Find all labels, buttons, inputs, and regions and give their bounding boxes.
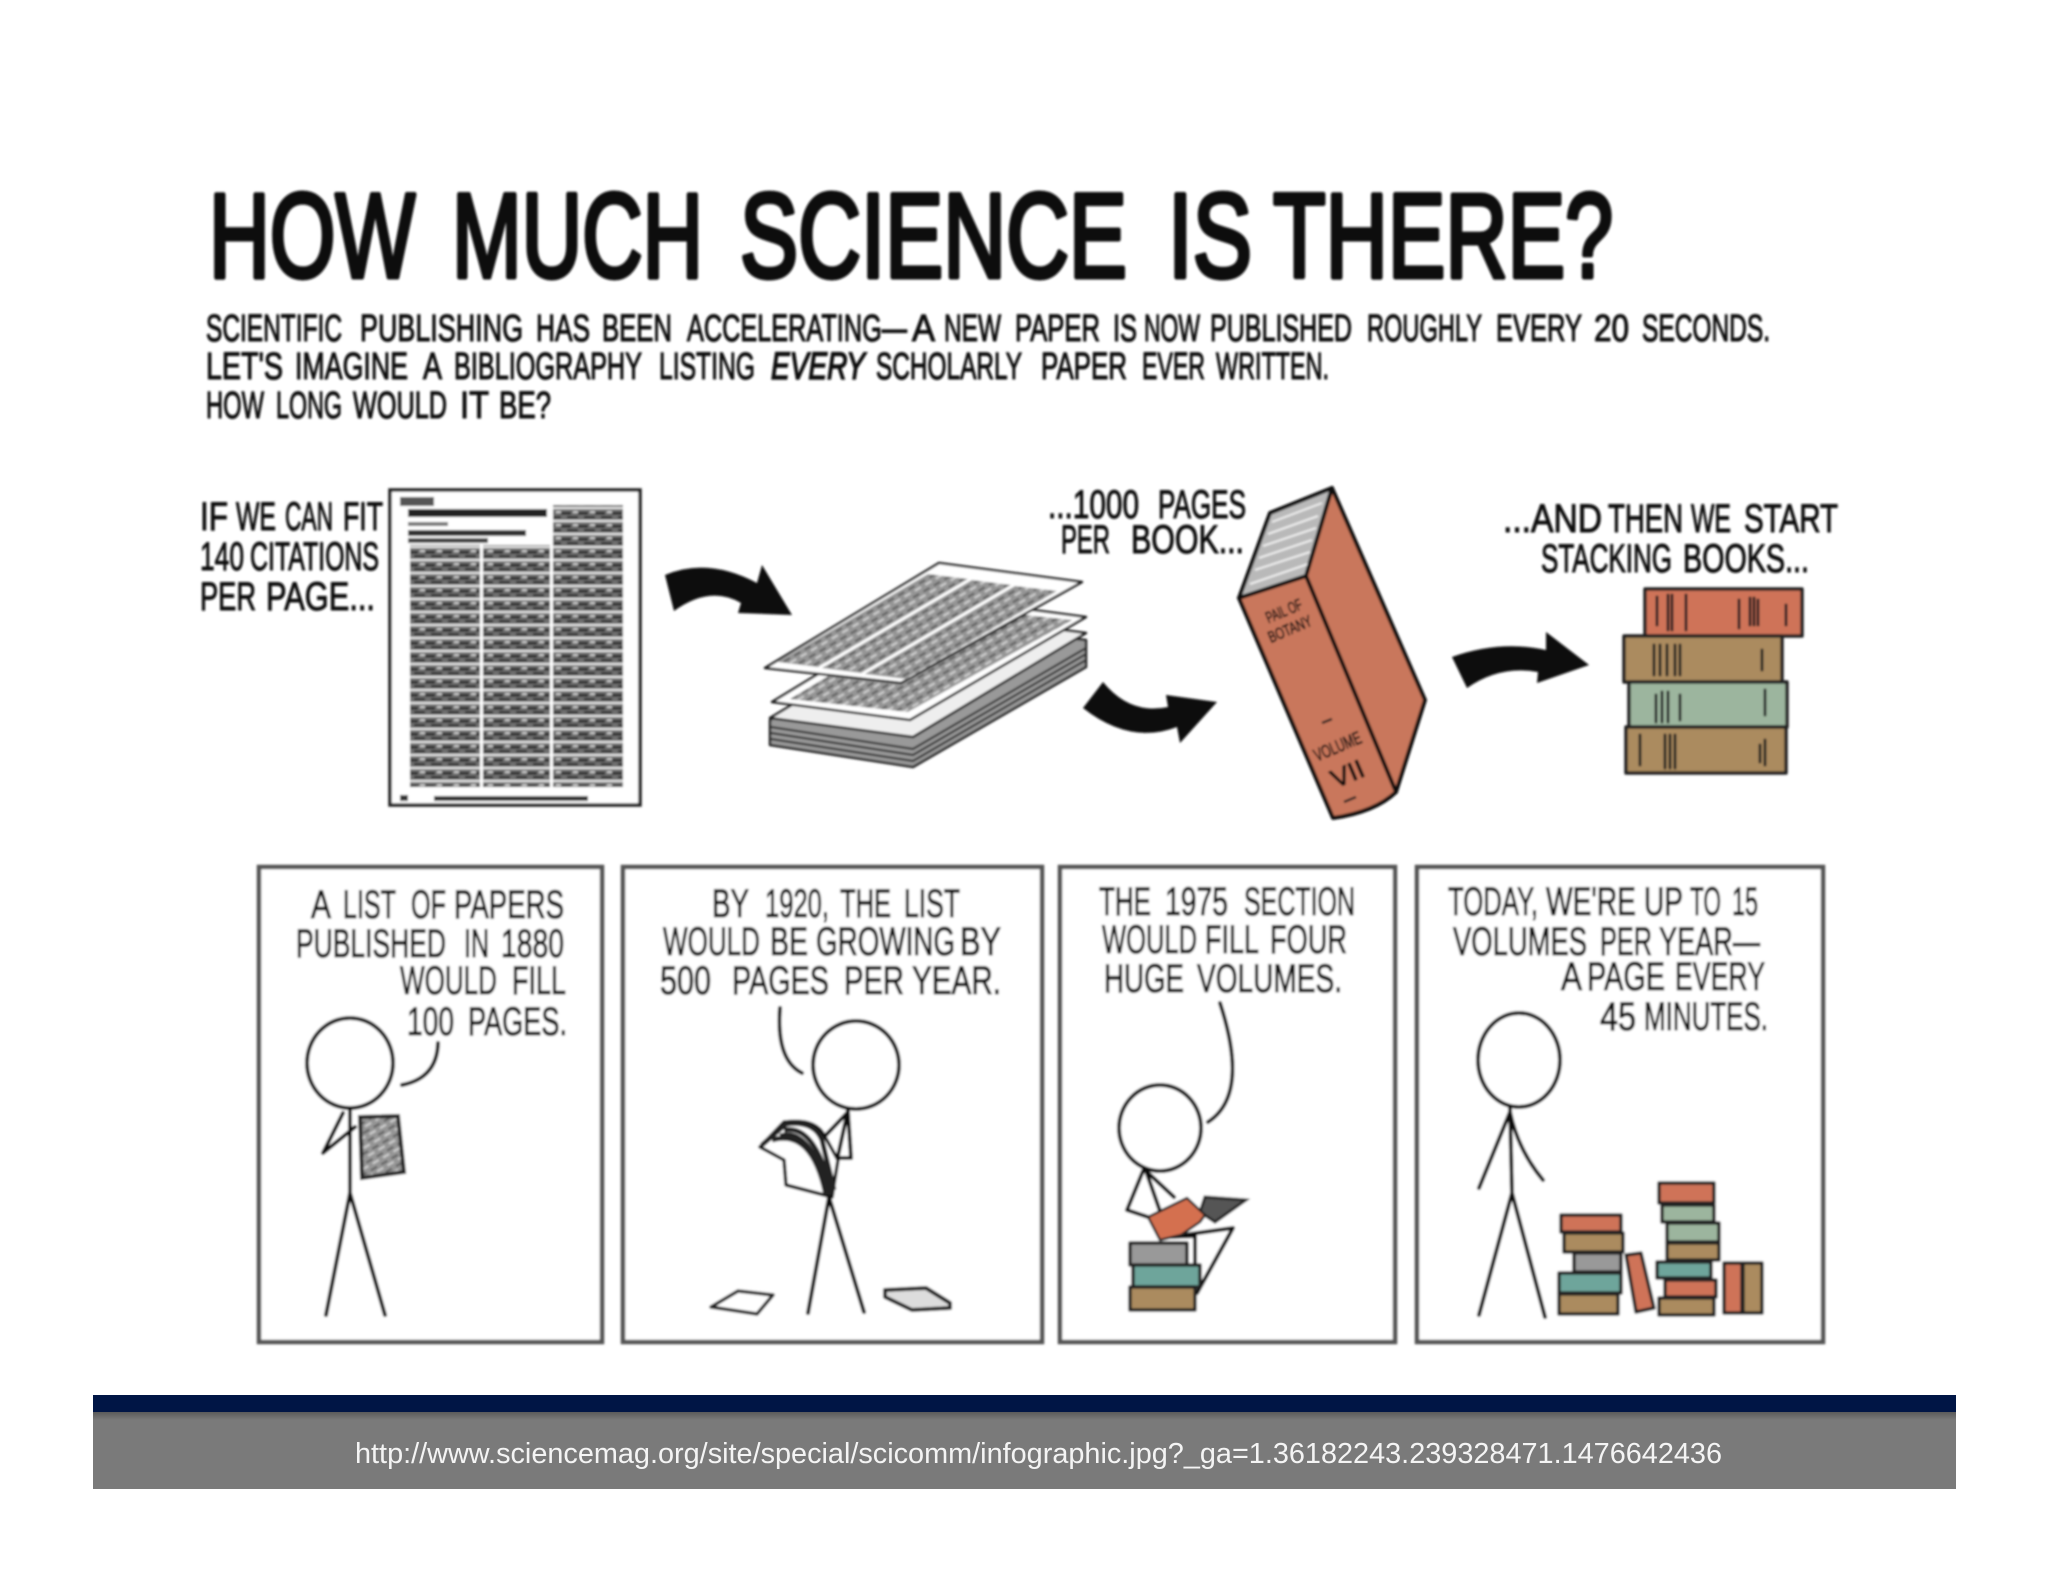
- panel 3 caption: THE: [1099, 880, 1151, 924]
- intro text: SCIENTIFIC: [206, 308, 342, 350]
- panel 4 caption: VOLUMES: [1453, 920, 1587, 964]
- label: stacking books: [1503, 497, 1838, 581]
- panel 4 caption: 15: [1732, 880, 1758, 924]
- intro text: WOULD: [353, 385, 447, 427]
- panel 3 caption: HUGE: [1104, 957, 1184, 1001]
- panel 3 caption: [1099, 880, 1355, 1001]
- arrow 3: [1452, 632, 1589, 688]
- label: stacking books: WE: [1691, 497, 1731, 541]
- intro text: 20: [1594, 308, 1629, 350]
- intro text: PAPER: [1015, 308, 1100, 350]
- title: [209, 169, 1613, 303]
- panel 2 caption: PAGES: [732, 959, 829, 1003]
- source URL: http://www.sciencemag.org/site/special/scicomm/infographic.jpg?_ga=1.36182243.239328471.1476642436: [355, 1438, 1722, 1470]
- panel: today: [1417, 867, 1823, 1342]
- panel 1 caption: IN: [464, 922, 489, 966]
- icon: large book: PAIL OF: [1263, 597, 1305, 627]
- intro text: SCHOLARLY: [876, 346, 1022, 388]
- panel 4 caption: TO: [1690, 880, 1721, 924]
- label: citations per page: CITATIONS: [250, 535, 379, 579]
- icon: stack of pages: [765, 563, 1086, 767]
- seated figure reading: [1119, 1003, 1246, 1293]
- label: citations per page: IF: [200, 495, 228, 539]
- intro text: LONG: [276, 385, 342, 427]
- label: pages per book: PER: [1061, 518, 1110, 562]
- title: MUCH: [452, 169, 703, 303]
- loose stack right: [885, 1288, 950, 1310]
- intro text: HAS: [536, 308, 590, 350]
- intro text: WRITTEN.: [1216, 346, 1329, 388]
- panel 4 caption: PER: [1600, 920, 1652, 964]
- panel 3 caption: SECTION: [1244, 880, 1355, 924]
- label: pages per book: PAGES: [1158, 483, 1246, 527]
- label: stacking books: THEN: [1608, 497, 1683, 541]
- panel 4 caption: WE'RE: [1546, 880, 1636, 924]
- panel 2 caption: LIST: [904, 882, 960, 926]
- panel 4 caption: TODAY,: [1448, 880, 1538, 924]
- panel 4 caption: A: [1561, 955, 1582, 999]
- label: pages per book: BOOK...: [1131, 518, 1244, 562]
- label: citations per page: CAN: [285, 495, 333, 539]
- panel 2 caption: PER: [844, 959, 904, 1003]
- panel 3 caption: FILL: [1205, 918, 1259, 962]
- intro text: EVER: [1142, 346, 1205, 388]
- intro text: PAPER: [1041, 346, 1127, 388]
- panel 2 caption: YEAR.: [912, 959, 1001, 1003]
- panel 2 caption: BE: [770, 920, 808, 964]
- panel 4 caption: [1448, 880, 1768, 1039]
- intro text: PUBLISHING: [360, 308, 523, 350]
- figure with pages: [307, 1018, 438, 1315]
- label: citations per page: FIT: [343, 495, 383, 539]
- panel 1 caption: 1880: [501, 922, 564, 966]
- intro text: PUBLISHED: [1210, 308, 1352, 350]
- title: IS: [1168, 169, 1252, 303]
- label: citations per page: [200, 495, 383, 619]
- label: pages per book: [1048, 483, 1246, 562]
- label: citations per page: 140: [200, 535, 244, 579]
- intro text: BIBLIOGRAPHY: [454, 346, 642, 388]
- label: citations per page: PER: [200, 575, 256, 619]
- figure with book: [760, 1008, 899, 1313]
- panel 1 caption: PAGES.: [468, 1000, 567, 1044]
- standing figure: [1478, 1013, 1560, 1317]
- label: stacking books: ...AND: [1503, 497, 1602, 541]
- panel 3 caption: 1975: [1165, 880, 1228, 924]
- panel 4 caption: 45: [1600, 995, 1636, 1039]
- label: citations per page: WE: [236, 495, 276, 539]
- label: pages per book: ...1000: [1048, 483, 1139, 527]
- title: SCIENCE: [740, 169, 1127, 303]
- icon: stack of four books: [1624, 589, 1802, 773]
- icon: bibliography page: [390, 490, 640, 805]
- panel 1 caption: FILL: [512, 959, 566, 1003]
- intro text: LET'S: [206, 346, 283, 388]
- intro text: A: [423, 346, 442, 388]
- title: THERE?: [1273, 169, 1613, 303]
- panel 2 caption: BY: [712, 882, 749, 926]
- panel 1 caption: LIST: [343, 883, 396, 927]
- icon: large book: BOTANY: [1266, 613, 1315, 647]
- panel 3 caption: VOLUMES.: [1197, 957, 1342, 1001]
- panel 1 caption: OF: [411, 883, 446, 927]
- title: HOW: [209, 169, 415, 303]
- intro text: ROUGHLY: [1367, 308, 1482, 350]
- intro text: BEEN: [602, 308, 672, 350]
- intro text: IMAGINE: [295, 346, 408, 388]
- panel 2 caption: 1920,: [765, 882, 829, 926]
- panel 2 caption: BY: [960, 920, 1001, 964]
- intro text: EVERY: [771, 346, 867, 388]
- icon: large book: [1239, 488, 1425, 818]
- intro text: IT: [460, 385, 489, 427]
- panel 2 caption: 500: [660, 959, 711, 1003]
- panel 1 caption: PUBLISHED: [296, 922, 446, 966]
- icon: large book: VOLUME: [1311, 728, 1365, 765]
- icon: large book: VII: [1326, 753, 1369, 794]
- label: stacking books: START: [1744, 497, 1838, 541]
- panel 2 caption: WOULD: [663, 920, 760, 964]
- panel 1 caption: WOULD: [400, 959, 497, 1003]
- intro text: A: [912, 308, 936, 350]
- panel 2 caption: [660, 882, 1001, 1003]
- panel 4 caption: YEAR—: [1659, 920, 1760, 964]
- panel: 1975: [1060, 867, 1395, 1342]
- intro text: LISTING: [659, 346, 755, 388]
- panel 3 caption: FOUR: [1270, 918, 1347, 962]
- intro text: HOW: [206, 385, 264, 427]
- book pile: [1130, 1243, 1200, 1310]
- panel 4 caption: MINUTES.: [1644, 995, 1768, 1039]
- intro text: NEW: [944, 308, 1001, 350]
- panel 1 caption: A: [311, 883, 331, 927]
- panel: 1880: [259, 867, 602, 1342]
- intro text: SECONDS.: [1642, 308, 1770, 350]
- panel 1 caption: 100: [407, 1000, 454, 1044]
- footer bar: [93, 1395, 1956, 1489]
- panel 2 caption: THE: [840, 882, 891, 926]
- arrow 1: [665, 565, 792, 615]
- intro text: EVERY: [1496, 308, 1582, 350]
- panel: 1920: [623, 867, 1042, 1342]
- loose sheet left: [711, 1291, 773, 1314]
- intro text: IS: [1113, 308, 1137, 350]
- label: citations per page: PAGE...: [266, 575, 375, 619]
- label: stacking books: BOOKS...: [1683, 537, 1809, 581]
- intro text: BE?: [499, 385, 551, 427]
- label: stacking books: STACKING: [1541, 537, 1672, 581]
- panel 1 caption: [296, 883, 567, 1044]
- intro text: [206, 308, 1770, 427]
- panel 4 caption: EVERY: [1675, 955, 1765, 999]
- book piles: [1559, 1183, 1762, 1315]
- arrow 2: [1083, 682, 1217, 743]
- intro text: NOW: [1144, 308, 1200, 350]
- panel 3 caption: WOULD: [1102, 918, 1197, 962]
- panel 4 caption: UP: [1644, 880, 1683, 924]
- panel 4 caption: PAGE: [1587, 955, 1665, 999]
- panel 2 caption: GROWING: [816, 920, 955, 964]
- intro text: ACCELERATING—: [687, 308, 907, 350]
- panel 1 caption: PAPERS: [454, 883, 564, 927]
